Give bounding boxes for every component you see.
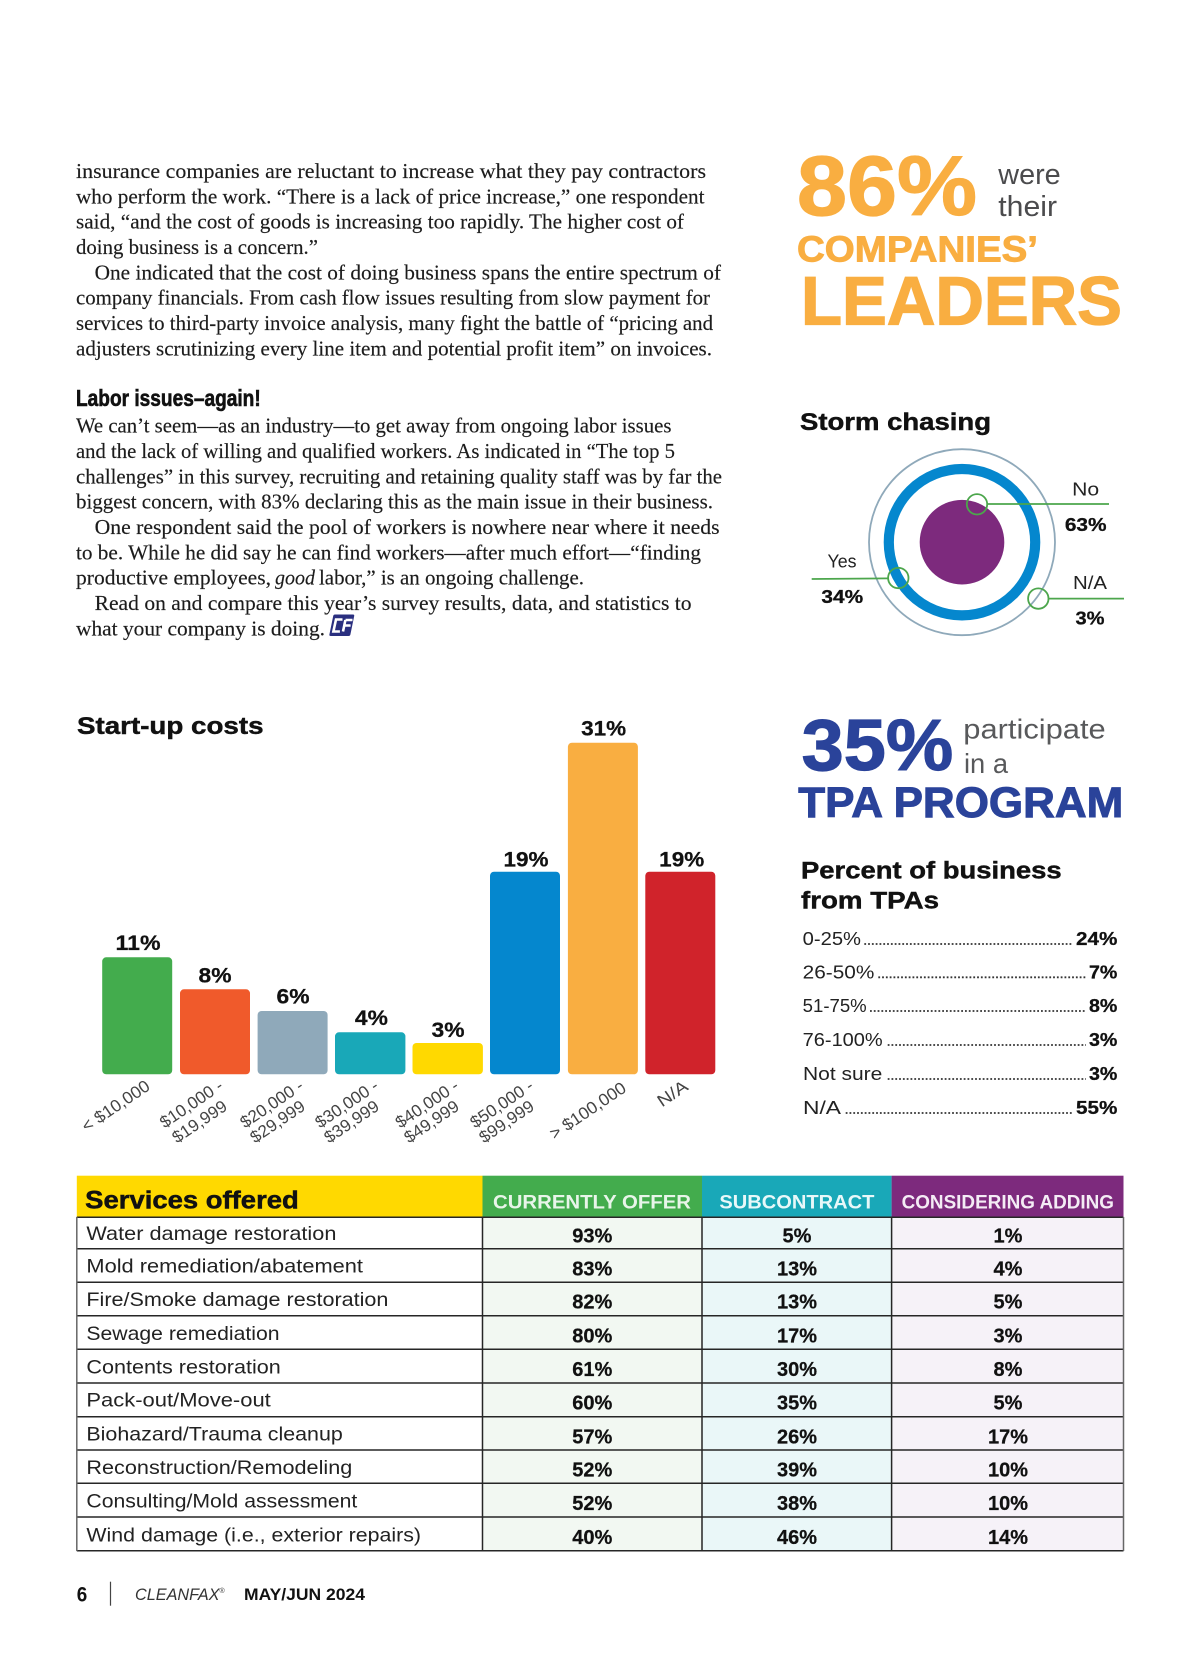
heading: labor issues: Labor issues–again! (76, 385, 261, 411)
row: wind: 46% (777, 1527, 817, 1549)
text: TPA program: TPA PROGRAM (798, 779, 1123, 827)
page number: 6 (77, 1584, 87, 1607)
labor paragraphs: good (275, 566, 315, 590)
labor paragraphs: Read on and compare this year’s survey results, data, and statistics to (95, 591, 692, 615)
row: biohazard (86, 1424, 1028, 1448)
panel: start-up costs (77, 713, 715, 1147)
panel: storm chasing (800, 409, 1124, 635)
callout: 35% TPA program (798, 706, 1123, 827)
row: water damage (86, 1223, 1023, 1248)
magazine name: ® (220, 1587, 226, 1595)
caption: participate in a (963, 714, 1106, 779)
opening paragraphs: company financials. From cash flow issues resulting from slow payment for (76, 286, 710, 310)
opening paragraphs: One indicated that the cost of doing business spans the entire spectrum of (95, 260, 721, 284)
callout: yes 34%: Yes (828, 552, 856, 572)
list: not sure: Not sure (803, 1063, 882, 1084)
heading: percent of business: Percent of business (801, 857, 1062, 884)
list: 0-25%: 0-25% (803, 928, 861, 949)
row: reconstruction: 52% (572, 1460, 613, 1482)
row: biohazard: Biohazard/Trauma cleanup (86, 1424, 343, 1446)
row: biohazard: 17% (988, 1426, 1028, 1448)
callout: no 63% (967, 479, 1109, 535)
caption: participate in a: in a (964, 748, 1008, 779)
axis labels: $49,999 (401, 1097, 463, 1147)
row: contents (86, 1356, 1023, 1381)
labor paragraphs: One respondent said the pool of workers is nowhere near where it needs (95, 515, 720, 539)
axis labels: $29,999 (247, 1097, 309, 1147)
heading: percent of business (801, 857, 1062, 914)
row: consulting (86, 1491, 1028, 1515)
opening paragraphs: said, “and the cost of goods is increasing too rapidly. The higher cost of (76, 210, 684, 234)
row: mold: Mold remediation/abatement (86, 1256, 364, 1278)
list: not sure (803, 1063, 1117, 1084)
table header: CURRENTLY OFFER (493, 1192, 691, 1214)
labor paragraphs: challenges” in this survey, recruiting and retaining quality staff was by far the (76, 464, 722, 488)
callout: yes 34%: 34% (821, 586, 863, 607)
issue date: MAY/JUN 2024 (244, 1585, 366, 1604)
row: fire/smoke: 82% (572, 1292, 613, 1314)
list: 76-100%: 3% (1089, 1029, 1117, 1050)
row: pack-out (86, 1390, 1023, 1414)
list: 26-50%: 7% (1089, 961, 1117, 982)
row: fire/smoke: 13% (777, 1292, 817, 1314)
heading: storm chasing: Storm chasing (800, 409, 991, 436)
callout: no 63%: No (1072, 479, 1099, 499)
row: water damage: 1% (994, 1226, 1023, 1248)
row: pack-out: Pack-out/Move-out (86, 1390, 271, 1412)
row: mold: 83% (572, 1258, 613, 1280)
row: biohazard: 26% (777, 1426, 817, 1448)
callout: n/a 3%: 3% (1076, 608, 1104, 628)
labor paragraphs: biggest concern, with 83% declaring this as the main issue in their business. (76, 490, 713, 514)
bar values: 31% (581, 718, 626, 741)
row: mold (86, 1256, 1023, 1280)
row: fire/smoke: 5% (994, 1292, 1023, 1314)
row: contents: Contents restoration (86, 1356, 281, 1378)
list: N/A (803, 1097, 1117, 1118)
bar values: 6% (276, 986, 310, 1009)
row: consulting: 38% (777, 1493, 817, 1515)
stat: 86%: 86% (797, 139, 977, 233)
row: contents: 8% (994, 1359, 1023, 1381)
radial chart: concentric rings (869, 449, 1055, 635)
callout: yes 34% (812, 552, 908, 607)
caption: were their: their (998, 191, 1057, 223)
callout: n/a 3%: N/A (1073, 573, 1107, 593)
row: water damage: 5% (783, 1226, 812, 1248)
callout: n/a 3% (1028, 573, 1124, 628)
bar values: 8% (198, 965, 232, 988)
bar values: 19% (504, 849, 549, 872)
row: pack-out: 60% (572, 1392, 613, 1414)
row: contents: 61% (572, 1359, 613, 1381)
labor paragraphs: to be. While he did say he can find workers—after much effort—“finding (76, 540, 701, 564)
article text block (76, 159, 722, 640)
list: N/A: 55% (1076, 1097, 1117, 1118)
bar values (116, 718, 705, 1042)
list: 26-50% (803, 961, 1117, 982)
table: services offered (77, 1176, 1123, 1551)
caption: participate in a: participate (963, 714, 1106, 745)
axis labels: $19,999 (169, 1097, 231, 1147)
callout: no 63%: 63% (1065, 514, 1107, 535)
row: wind: 14% (988, 1527, 1028, 1549)
labor paragraphs: labor,” is an ongoing challenge. (319, 566, 584, 590)
axis labels: $99,999 (476, 1097, 538, 1147)
row: fire/smoke (86, 1289, 1023, 1314)
row: contents: 30% (777, 1359, 817, 1381)
icon: CF end mark (329, 614, 354, 636)
caption: were their (997, 159, 1061, 223)
footer (77, 1582, 366, 1607)
list: N/A: N/A (803, 1097, 842, 1118)
bar values: 4% (355, 1007, 388, 1030)
bar values: 3% (432, 1019, 465, 1042)
row: mold: 4% (994, 1258, 1023, 1280)
row: wind (86, 1524, 1028, 1549)
list: 51-75%: 8% (1089, 995, 1117, 1016)
row: sewage: 17% (777, 1325, 817, 1347)
list: 76-100%: 76-100% (803, 1029, 883, 1050)
row: reconstruction: 10% (988, 1460, 1028, 1482)
opening paragraphs: doing business is a concern.” (76, 235, 318, 259)
bar values: 11% (116, 932, 161, 955)
opening paragraphs: insurance companies are reluctant to increase what they pay contractors (76, 159, 706, 183)
row: reconstruction: 39% (777, 1460, 817, 1482)
table header: Services offered (85, 1186, 299, 1214)
row: mold: 13% (777, 1258, 817, 1280)
opening paragraphs (76, 159, 721, 360)
list: not sure: 3% (1089, 1063, 1117, 1084)
list: 0-25%: 24% (1076, 928, 1117, 949)
list: 0-25% (803, 928, 1117, 949)
row: sewage: 3% (994, 1325, 1023, 1347)
axis labels: < $10,000 (78, 1076, 153, 1136)
row: reconstruction: Reconstruction/Remodeling (86, 1457, 352, 1479)
opening paragraphs: who perform the work. “There is a lack of price increase,” one respondent (76, 184, 705, 208)
axis labels: $20,000 - (237, 1076, 307, 1132)
list: 26-50%: 26-50% (803, 961, 874, 982)
axis labels: $40,000 - (392, 1076, 462, 1132)
axis labels: $10,000 - (156, 1076, 227, 1132)
stat: 35%: 35% (802, 706, 953, 786)
row: consulting: 10% (988, 1493, 1028, 1515)
row: pack-out: 5% (994, 1392, 1023, 1414)
table header (77, 1176, 1123, 1217)
caption: were their: were (997, 159, 1061, 191)
labor paragraphs: what your company is doing. (76, 616, 325, 640)
row: reconstruction (86, 1457, 1028, 1482)
row: fire/smoke: Fire/Smoke damage restoration (86, 1289, 388, 1311)
table column fills (482, 1217, 1124, 1551)
magazine name: CLEANFAX (135, 1585, 220, 1604)
axis labels (78, 1076, 692, 1147)
labor paragraphs: and the lack of willing and qualified workers. As indicated in “The top 5 (76, 439, 675, 463)
row: consulting: 52% (572, 1493, 613, 1515)
table grid (77, 1217, 1123, 1551)
list: 51-75%: 51-75% (803, 995, 867, 1016)
opening paragraphs: adjusters scrutinizing every line item and potential profit item” on invoices. (76, 336, 712, 360)
labor paragraphs: productive employees, (76, 566, 271, 590)
table header: CONSIDERING ADDING (902, 1192, 1114, 1214)
labor paragraphs (76, 414, 722, 640)
heading: start-up costs: Start-up costs (77, 713, 264, 740)
row: sewage: Sewage remediation (86, 1323, 280, 1345)
heading: percent of business: from TPAs (801, 887, 939, 914)
row: wind: 40% (572, 1527, 613, 1549)
bar values: 19% (659, 849, 705, 872)
bar chart (102, 743, 715, 1074)
row: pack-out: 35% (777, 1392, 817, 1414)
text: companies': COMPANIES’ (797, 228, 1038, 270)
opening paragraphs: services to third-party invoice analysis, many fight the battle of “pricing and (76, 311, 713, 335)
axis labels: $39,999 (321, 1097, 383, 1147)
text: leaders: LEADERS (801, 262, 1122, 340)
row: consulting: Consulting/Mold assessment (86, 1491, 358, 1513)
axis labels: $50,000 - (467, 1076, 537, 1132)
axis labels: N/A (654, 1076, 692, 1111)
row: water damage: 93% (572, 1226, 613, 1248)
row: sewage (86, 1323, 1023, 1347)
panel: percent of business from TPAs (801, 857, 1117, 1118)
row: water damage: Water damage restoration (86, 1223, 336, 1245)
labor paragraphs: We can’t seem—as an industry—to get away from ongoing labor issues (76, 414, 671, 438)
row: sewage: 80% (572, 1325, 613, 1347)
axis labels: $30,000 - (312, 1076, 382, 1132)
list: 51-75% (803, 995, 1117, 1016)
list: 76-100% (803, 1029, 1117, 1050)
row: biohazard: 57% (572, 1426, 613, 1448)
callout: 86% leaders (797, 139, 1122, 340)
axis labels: > $100,000 (546, 1078, 630, 1143)
row: wind: Wind damage (i.e., exterior repairs) (86, 1524, 421, 1546)
table header: SUBCONTRACT (719, 1192, 875, 1214)
